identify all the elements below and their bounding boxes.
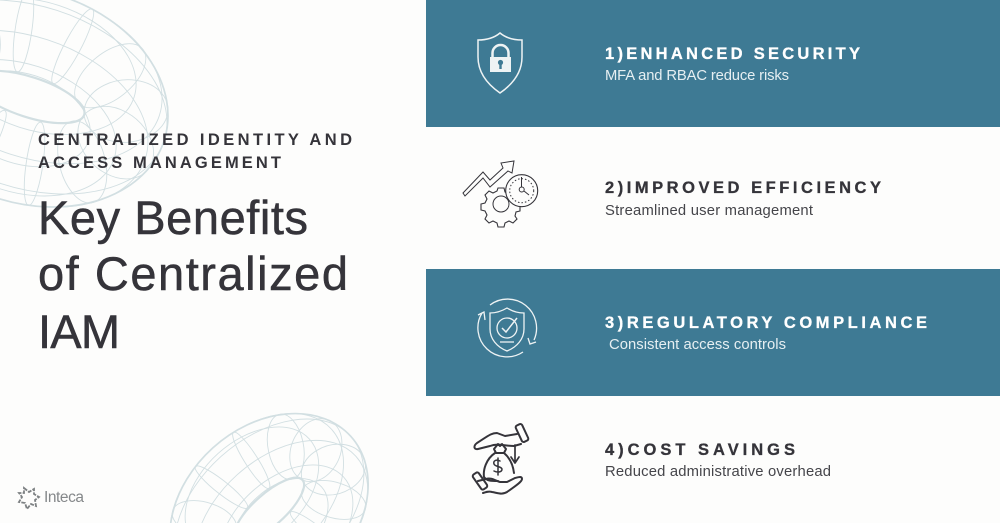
text: MFA and RBAC: MFA and RBAC reduce risks [605, 68, 789, 84]
main title [38, 191, 348, 358]
heading: improved efficiency: 2)IMPROVED EFFICIENCY [605, 179, 881, 197]
icon: growth arrow, gear and clock [463, 161, 538, 227]
text: streamlined: Streamlined user management [605, 203, 813, 219]
text: consistent: Consistent access controls [609, 337, 786, 353]
heading: enhanced security: 1)ENHANCED SECURITY [605, 45, 860, 63]
wireframe torus: bottom [170, 412, 369, 523]
logo: Inteca [19, 488, 84, 509]
eyebrow heading: CENTRALIZED IDENTITY AND [38, 131, 352, 149]
eyebrow heading: ACCESS MANAGEMENT [38, 154, 281, 172]
main title: IAM [38, 305, 120, 358]
icon: hands with money bag [472, 423, 529, 494]
icon: shield check with arrows [478, 299, 537, 357]
wireframe torus: top left [0, 0, 169, 208]
main title: Key Benefits [38, 191, 308, 244]
heading: cost savings: 4)COST SAVINGS [605, 441, 795, 459]
main title: of Centralized [38, 247, 348, 300]
heading: regulatory compliance: 3)REGULATORY COMPLIANCE [605, 314, 927, 332]
panel: improved efficiency [463, 161, 881, 227]
logo: Inteca: Inteca [44, 489, 84, 506]
panel: enhanced security [426, 0, 1000, 127]
eyebrow heading [38, 131, 352, 172]
panel: regulatory compliance [426, 269, 1000, 396]
panel: cost savings [472, 423, 831, 494]
icon: shield with padlock [478, 33, 522, 93]
text: reduced: Reduced administrative overhead [605, 464, 831, 480]
